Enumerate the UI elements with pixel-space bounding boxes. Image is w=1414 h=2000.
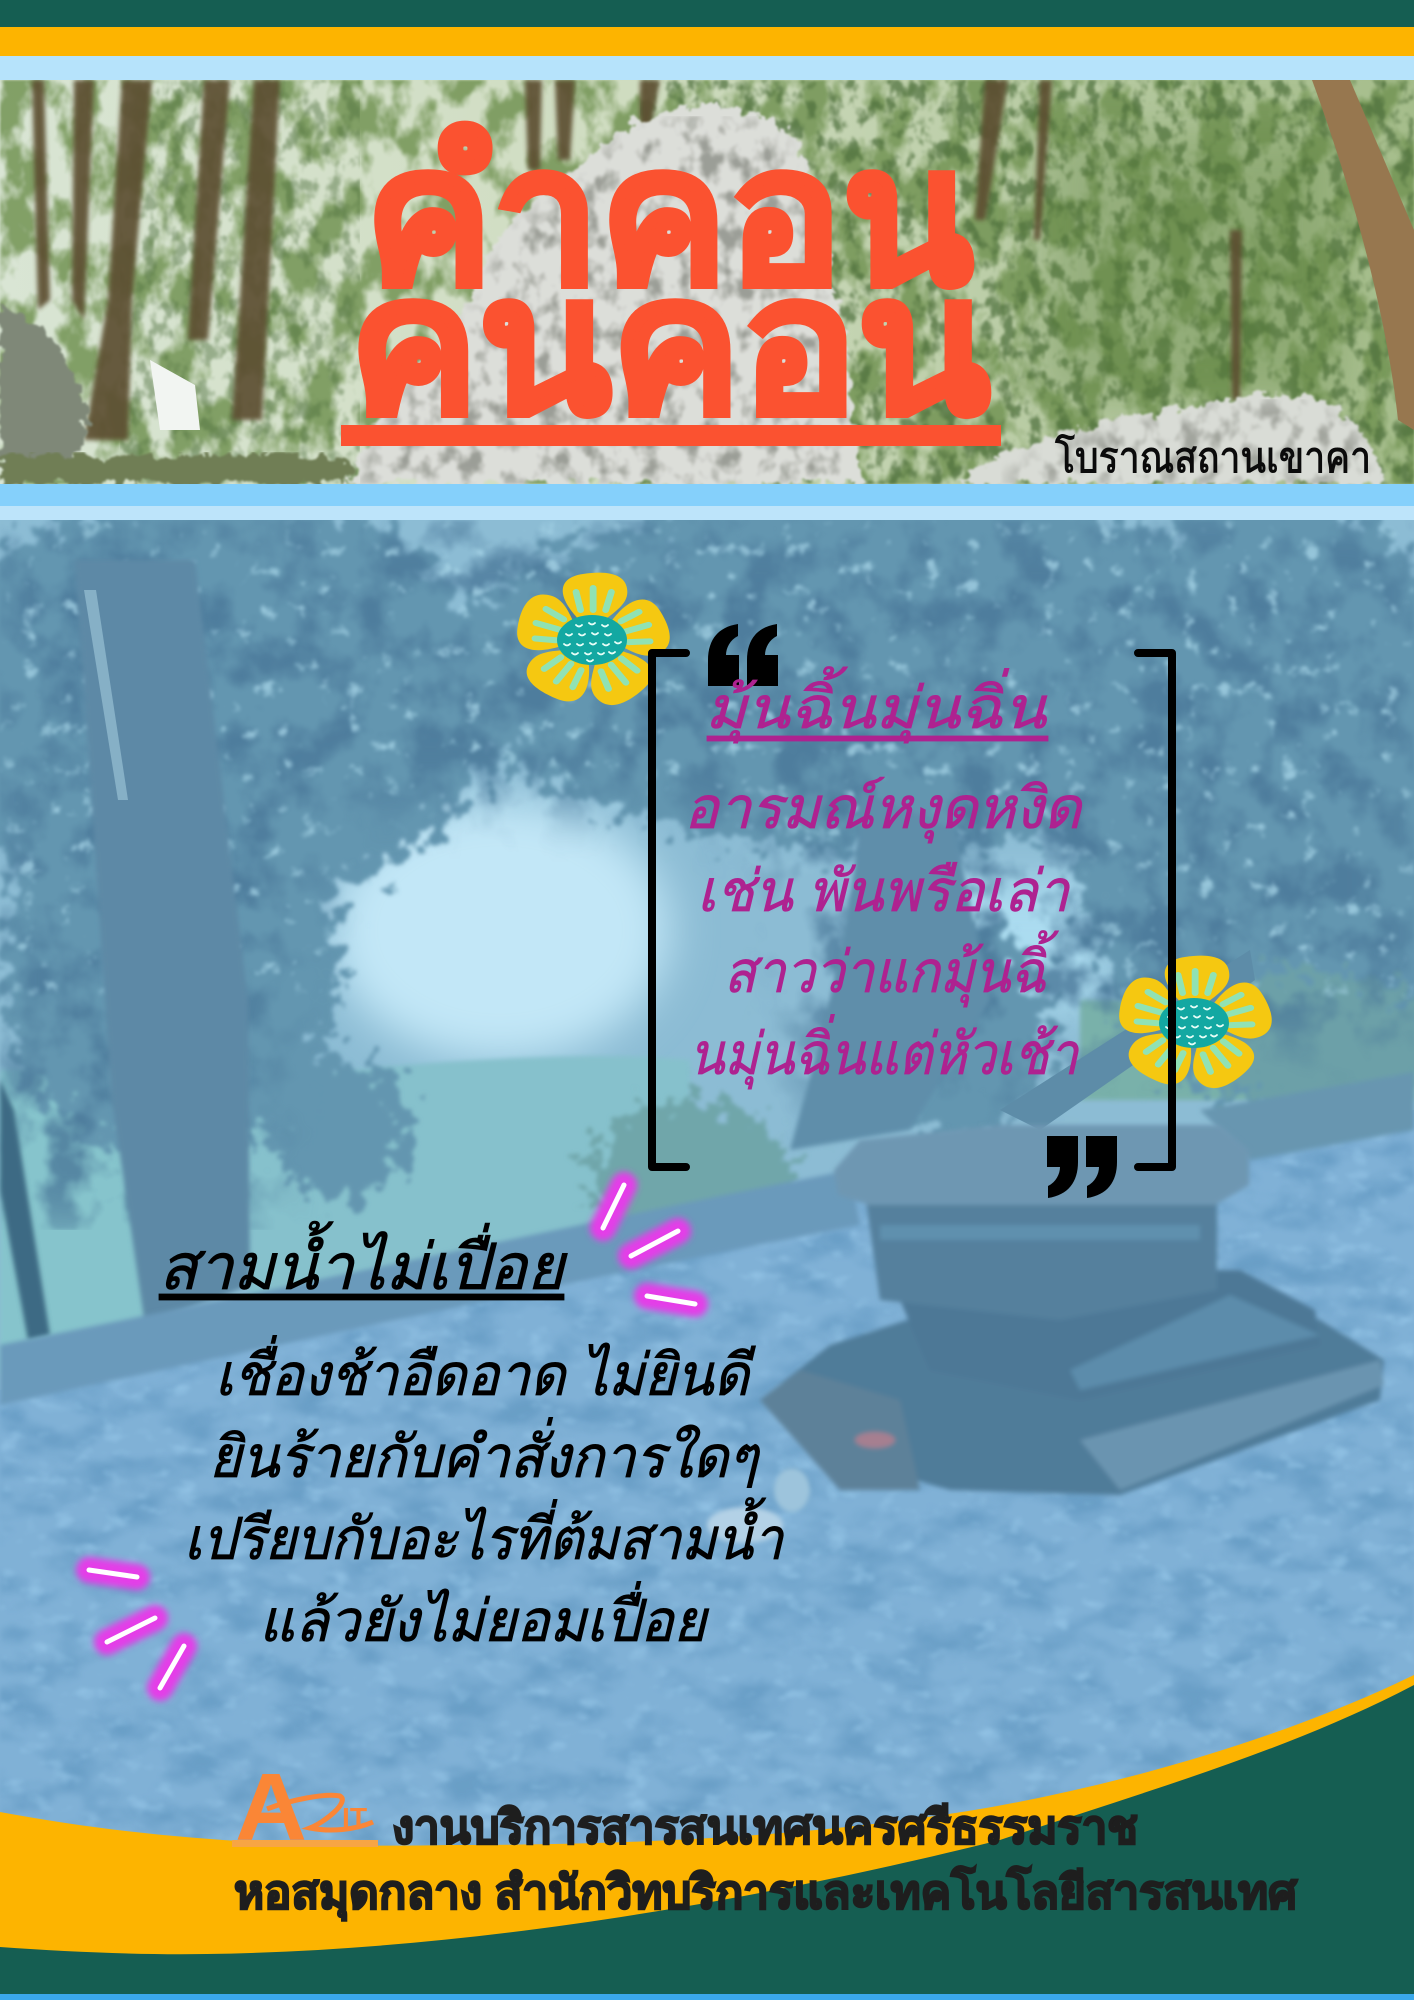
decoration: yellow flower top	[510, 573, 676, 713]
tree trunk: large right	[1312, 80, 1414, 430]
saying block: word and meaning	[159, 1221, 785, 1654]
icon: opening quote mark	[708, 624, 778, 686]
bottom edge stripe	[0, 1994, 1414, 2000]
boulder: right rocks	[960, 394, 1385, 484]
low stone wall	[0, 1170, 860, 1405]
quote meaning line 4: นมุ่นฉิ่นแต่หัวเช้า	[689, 1014, 1080, 1090]
tree trunk: centre	[790, 790, 990, 1150]
quote meaning line 1: อารมณ์หงุดหงิด	[684, 776, 1084, 844]
foliage	[0, 490, 1414, 1240]
footer line 2: หอสมุดกลาง สำนักวิทบริการและเทคโนโลยีสารสนเทศ	[234, 1865, 1298, 1921]
decoration: yellow flower right	[1112, 956, 1278, 1096]
quote block: word and meaning	[684, 666, 1084, 1090]
ground	[0, 1110, 1414, 1860]
stone monument	[707, 1125, 1384, 1543]
saying meaning line 4: แล้วยังไม่ยอมเปื่อย	[259, 1581, 710, 1654]
saying heading: สามน้ำไม่เปื่อย	[159, 1221, 567, 1303]
saying meaning line 1: เชื่องช้าอืดอาด ไม่ยินดี	[215, 1335, 756, 1408]
logo	[232, 1754, 378, 1861]
footer organisation text	[234, 1801, 1298, 1921]
title line 2: คนคอน	[349, 238, 990, 453]
footer wave: green	[0, 1685, 1414, 1994]
title underline	[343, 427, 999, 444]
boulders: left rocks	[0, 310, 350, 484]
logo: IT	[342, 1802, 367, 1833]
logo: A	[235, 1754, 307, 1861]
top band: green, yellow and light blue stripes	[0, 0, 1414, 80]
footer line 1: งานบริการสารสนเทศนครศรีธรรมราช	[392, 1801, 1138, 1853]
header photo: forest with boulders	[0, 80, 1414, 484]
quote meaning line 3: สาวว่าแกมุ้นฉิ้	[724, 930, 1059, 1008]
photo caption: โบราณสถานเขาคา	[1055, 433, 1371, 481]
mid divider band	[0, 484, 1414, 520]
distant field	[396, 998, 1414, 1105]
quote heading underline	[707, 736, 1048, 741]
title line 1: คำคอน	[365, 109, 973, 324]
boulder: central rock	[350, 106, 860, 484]
neon sparks top right	[603, 1185, 695, 1304]
tree trunk: main left	[75, 560, 250, 1325]
icon: closing quote mark	[1047, 1136, 1117, 1198]
saying heading underline	[159, 1294, 564, 1300]
saying meaning line 2: ยินร้ายกับคำสั่งการใดๆ	[209, 1417, 761, 1490]
title	[343, 109, 999, 453]
quote meaning line 2: เช่น พันพรือเล่า	[697, 859, 1071, 924]
neon sparks bottom left	[89, 1570, 184, 1688]
foliage: dark mottling	[0, 520, 1414, 1230]
foliage: light gaps	[0, 520, 1414, 1000]
footer wave: yellow	[0, 1675, 1414, 1994]
tree trunks	[32, 80, 1242, 440]
sky opening	[330, 800, 1100, 1060]
saying meaning line 3: เปรียบกับอะไรที่ต้มสามน้ำ	[184, 1497, 785, 1572]
quote heading: มุ้นฉิ้นมุ่นฉิ่น	[705, 666, 1047, 744]
bracket frame around quote	[652, 653, 1172, 1167]
tree trunk: thin left	[0, 1080, 50, 1340]
main photo: hazy blue temple terrace	[0, 490, 1414, 1860]
